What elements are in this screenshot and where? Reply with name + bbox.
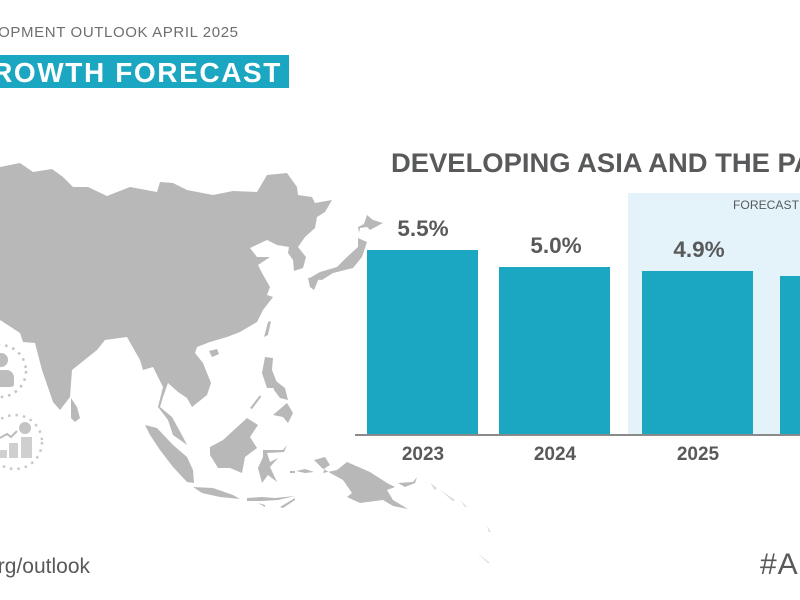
Sri Lanka	[71, 398, 80, 422]
forecast band: FORECAST	[733, 198, 800, 212]
map of Asia and the Pacific	[0, 163, 491, 563]
bar 2024: 2024	[534, 444, 577, 465]
axis	[355, 434, 800, 436]
Lesser Sunda	[247, 496, 295, 501]
bar 2023	[367, 216, 478, 465]
bar 2023: 5.5%	[397, 216, 449, 241]
Sumatra	[145, 425, 194, 483]
bar chart	[355, 216, 800, 465]
Solomon and outer islands	[430, 483, 491, 563]
bar 2024	[499, 233, 610, 465]
bar 2026	[780, 276, 800, 435]
Maluku	[296, 469, 314, 473]
bar 2025: 2025	[677, 444, 720, 465]
icon: growth chart and coins	[0, 415, 42, 469]
Philippines	[262, 357, 279, 388]
Borneo	[210, 418, 258, 473]
bar 2025	[642, 237, 753, 465]
bar 2025: 4.9%	[673, 237, 725, 262]
icon: people	[0, 345, 26, 397]
bar 2024: 5.0%	[530, 233, 582, 258]
Hainan	[209, 349, 219, 357]
bar 2023: 2023	[402, 444, 444, 465]
New Guinea	[314, 457, 408, 509]
Taiwan	[264, 321, 271, 337]
Java	[193, 487, 240, 499]
forecast band	[628, 193, 800, 435]
Sulawesi	[258, 445, 287, 483]
New Britain	[398, 477, 417, 487]
Japan	[358, 215, 383, 233]
